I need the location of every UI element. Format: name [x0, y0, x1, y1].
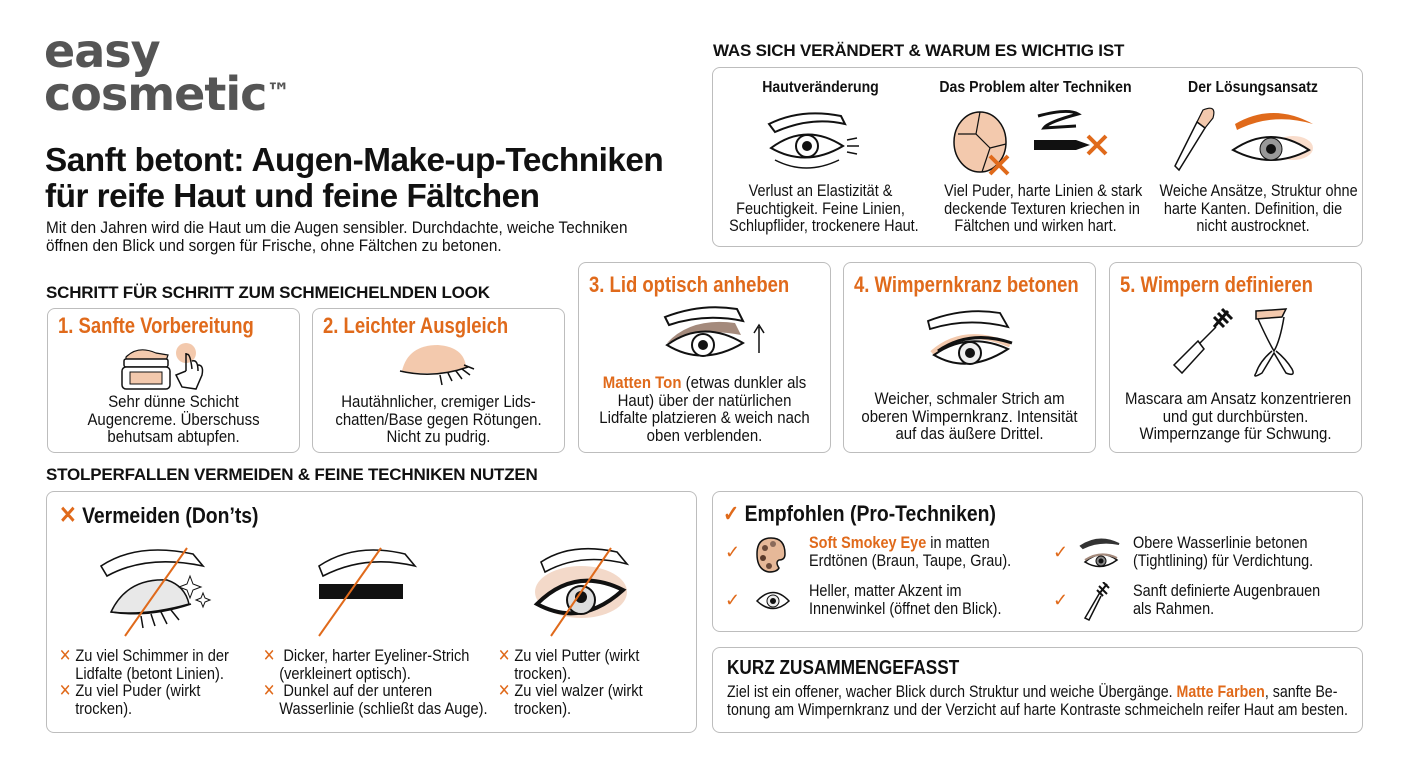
column: Problem: Viel Puder, harte Linien & stark: [944, 181, 1142, 200]
column: Hautveränderung: Schlupflider, trockenere Haut.: [729, 216, 919, 235]
column: Problem: Fältchen und wirken hart.: [954, 216, 1117, 235]
icon: lined eye: [927, 310, 1012, 365]
column: Hautveränderung: [729, 79, 919, 235]
title: [45, 141, 663, 214]
item: inner corner: Heller, matter Akzent im: [809, 581, 962, 600]
column: Problem: Das Problem alter Techniken: [939, 79, 1132, 96]
item: tightlining: (Tightlining) für Verdichtung.: [1133, 551, 1313, 570]
item: smokey eye: Erdtönen (Braun, Taupe, Grau).: [809, 551, 1011, 570]
panel: changes: [712, 67, 1363, 247]
panel: step 1: Augencreme. Überschuss: [87, 410, 260, 428]
panel: step 2: chatten/Base gegen Rötungen.: [335, 410, 542, 428]
icon: shimmer eye crossed: [100, 547, 212, 637]
item: brows: als Rahmen.: [1133, 599, 1214, 618]
panel: step 5: Wimpernzange für Schwung.: [1139, 424, 1332, 443]
panel: step 4: Weicher, schmaler Strich am: [874, 389, 1065, 408]
summary text: Ziel ist ein offener, wacher Blick durch Struktur und weiche Übergänge. Matte Farben, sanfte Be-: [727, 682, 1337, 701]
item: smokey eye: Soft Smokey Eye in matten: [809, 533, 990, 552]
intro text: [46, 218, 627, 255]
icon: dark eye crossed: [534, 547, 630, 637]
panel: step 3: Lidfalte platzieren & weich nach: [599, 408, 810, 427]
list: don'ts 2: ✕ Dunkel auf der unteren: [263, 681, 432, 700]
column: Hautveränderung: Hautveränderung: [762, 79, 879, 96]
heading: empfohlen: ✓ Empfohlen (Pro-Techniken): [723, 501, 996, 526]
heading: stolperfallen: STOLPERFALLEN VERMEIDEN & FEINE TECHNIKEN NUTZEN: [46, 465, 538, 484]
summary text: [727, 682, 1348, 719]
title: für reife Haut und feine Fältchen: [45, 177, 539, 214]
list: don'ts 3: [498, 646, 643, 718]
list: don'ts 1: ✕ Zu viel Puder (wirkt: [59, 681, 200, 700]
icon: mascara and curler: [1173, 308, 1294, 377]
item: inner corner: [725, 581, 1002, 618]
icon: cream jar and finger: [121, 343, 204, 390]
column: Lösung: harte Kanten. Definition, die: [1164, 198, 1342, 218]
column: Lösung: nicht austrocknet.: [1196, 216, 1310, 235]
item: brows: ✓: [1053, 590, 1068, 610]
list: don'ts 3: trocken).: [514, 664, 571, 682]
list: don'ts 2: [263, 646, 488, 718]
list: don'ts 1: Lidfalte (betont Linien).: [75, 664, 224, 682]
list: don'ts 3: ✕ Zu viel walzer (wirkt: [498, 681, 643, 700]
panel: step 5: [1109, 262, 1362, 453]
item: tightlining: Obere Wasserlinie betonen: [1133, 533, 1308, 552]
panel: step 1: Sehr dünne Schicht: [108, 392, 239, 411]
item: brows: [1053, 581, 1320, 621]
list: don'ts 1: ✕ Zu viel Schimmer in der: [59, 646, 229, 665]
panel: step 2: 2. Leichter Ausgleich: [323, 313, 508, 338]
column: Problem: [939, 79, 1142, 235]
list: don'ts 2: Wasserlinie (schließt das Auge).: [279, 698, 488, 718]
intro text: Mit den Jahren wird die Haut um die Augen sensibler. Durchdachte, weiche Techniken: [46, 218, 627, 237]
icon: thick liner crossed: [318, 547, 418, 637]
heading: was sich verändert: WAS SICH VERÄNDERT & WARUM ES WICHTIG IST: [713, 41, 1124, 60]
heading: vermeiden: ✕ Vermeiden (Don’ts): [59, 502, 258, 529]
panel: step 5: 5. Wimpern definieren: [1120, 272, 1313, 297]
panel: step 2: Nicht zu pudrig.: [387, 427, 490, 446]
column: Lösung: Weiche Ansätze, Struktur ohne: [1160, 181, 1358, 200]
logo: easy: [44, 24, 160, 78]
panel: step 5: Mascara am Ansatz konzentrieren: [1125, 389, 1351, 408]
list: don'ts 3: trocken).: [514, 698, 571, 718]
logo: [44, 24, 289, 121]
panel: step 1: 1. Sanfte Vorbereitung: [58, 313, 254, 338]
item: tightlining: [1053, 533, 1313, 570]
column: Problem: deckende Texturen kriechen in: [944, 198, 1140, 218]
panel: step 3: [578, 262, 831, 453]
list: don'ts 1: [59, 646, 229, 718]
item: smokey eye: [725, 533, 1011, 573]
item: inner corner: ✓: [725, 590, 740, 610]
column: Lösung: [1160, 79, 1358, 235]
panel: summary: [712, 647, 1363, 733]
list: don'ts 1: trocken).: [75, 698, 132, 718]
column: Lösung: Der Lösungsansatz: [1188, 79, 1318, 96]
panel: step 1: [47, 308, 300, 453]
panel: step 1: behutsam abtupfen.: [107, 427, 240, 446]
panel: step 5: und gut durchbürsten.: [1163, 406, 1308, 426]
panel: step 4: 4. Wimpernkranz betonen: [854, 272, 1079, 297]
panel: step 4: oberen Wimpernkranz. Intensität: [861, 406, 1078, 426]
panel: step 3: Haut) über der natürlichen: [618, 390, 791, 410]
panel: empfohlen: [712, 491, 1363, 632]
column: Hautveränderung: Feuchtigkeit. Feine Linien,: [736, 198, 905, 218]
heading: kurz zusammengefasst: KURZ ZUSAMMENGEFASST: [727, 657, 959, 679]
panel: step 3: oben verblenden.: [647, 426, 762, 444]
panel: step 3: Matten Ton (etwas dunkler als: [603, 373, 806, 392]
item: smokey eye: ✓: [725, 542, 740, 562]
intro text: öffnen den Blick und sorgen für Frische, ohne Fältchen zu betonen.: [46, 236, 502, 255]
list: don'ts 2: ✕ Dicker, harter Eyeliner-Strich: [263, 646, 469, 665]
heading: schritt für schritt: SCHRITT FÜR SCHRITT ZUM SCHMEICHELNDEN LOOK: [46, 283, 490, 302]
panel: step 2: Hautähnlicher, cremiger Lids-: [341, 392, 536, 411]
item: brows: Sanft definierte Augenbrauen: [1133, 581, 1320, 600]
panel: step 3: 3. Lid optisch anheben: [589, 272, 789, 297]
icon: aging eye: [768, 112, 859, 169]
icon: brush and soft eye: [1174, 108, 1313, 172]
panel: don'ts: [46, 491, 697, 733]
panel: step 4: [843, 262, 1096, 453]
icon: lifted lid eye: [664, 306, 765, 357]
item: inner corner: Innenwinkel (öffnet den Blick).: [809, 599, 1002, 618]
panel: step 2: [312, 308, 565, 453]
list: don'ts 3: ✕ Zu viel Putter (wirkt: [498, 646, 639, 665]
icon: cracked powder and liner: [953, 110, 1108, 176]
logo: cosmetic™: [44, 67, 289, 121]
column: Hautveränderung: Verlust an Elastizität &: [749, 181, 892, 200]
item: tightlining: ✓: [1053, 542, 1068, 562]
list: don'ts 2: (verkleinert optisch).: [279, 664, 411, 682]
icon: closed eyelid: [400, 345, 474, 386]
title: Sanft betont: Augen-Make-up-Techniken: [45, 141, 663, 178]
summary text: tonung am Wimpernkranz und der Verzicht auf harte Kontraste schmeicheln reifer Haut am besten.: [727, 700, 1348, 719]
panel: step 4: auf das äußere Drittel.: [895, 424, 1044, 443]
